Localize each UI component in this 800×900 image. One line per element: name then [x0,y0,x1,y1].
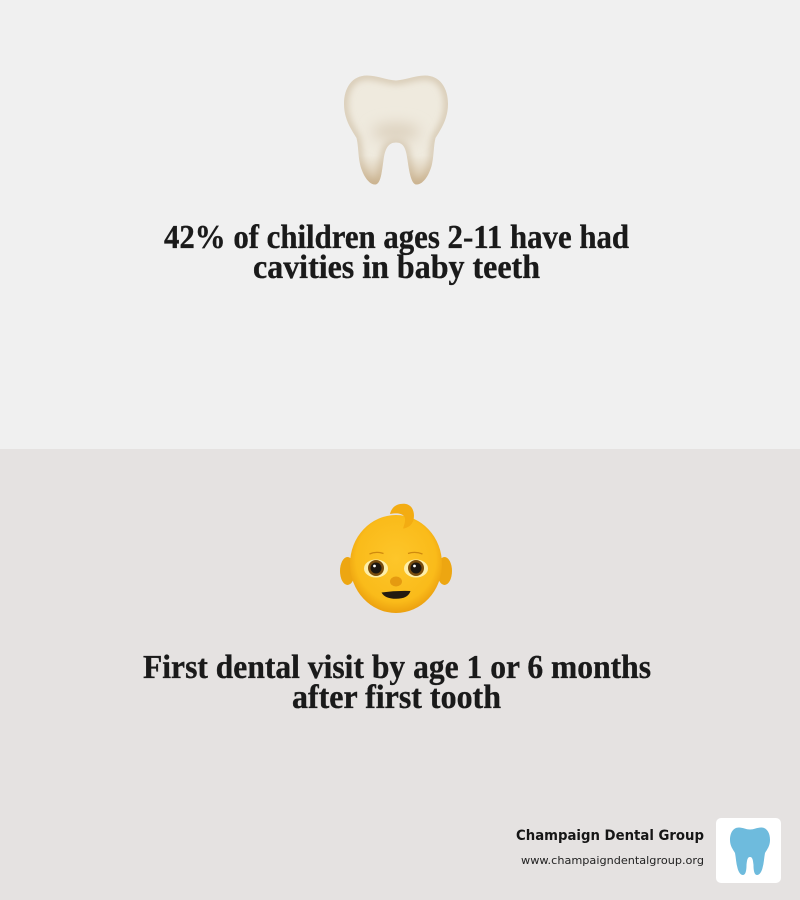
panel: top background [0,0,800,449]
title: cavities statistic: cavities in baby teeth [253,249,540,286]
website url: www.champaigndentalgroup.org [521,854,704,867]
title: cavities statistic [164,219,629,286]
panel: bottom background [0,449,800,900]
icon: tooth [344,76,448,184]
title: first dental visit: after first tooth [292,679,501,716]
brand name: Champaign Dental Group [516,828,704,844]
logo: blue tooth on white card [716,818,781,883]
title: cavities statistic: 42% of children ages 2-11 have had [164,219,629,256]
icon: baby face [340,504,452,613]
title: first dental visit [143,649,651,716]
title: first dental visit: First dental visit by age 1 or 6 months [143,649,651,686]
